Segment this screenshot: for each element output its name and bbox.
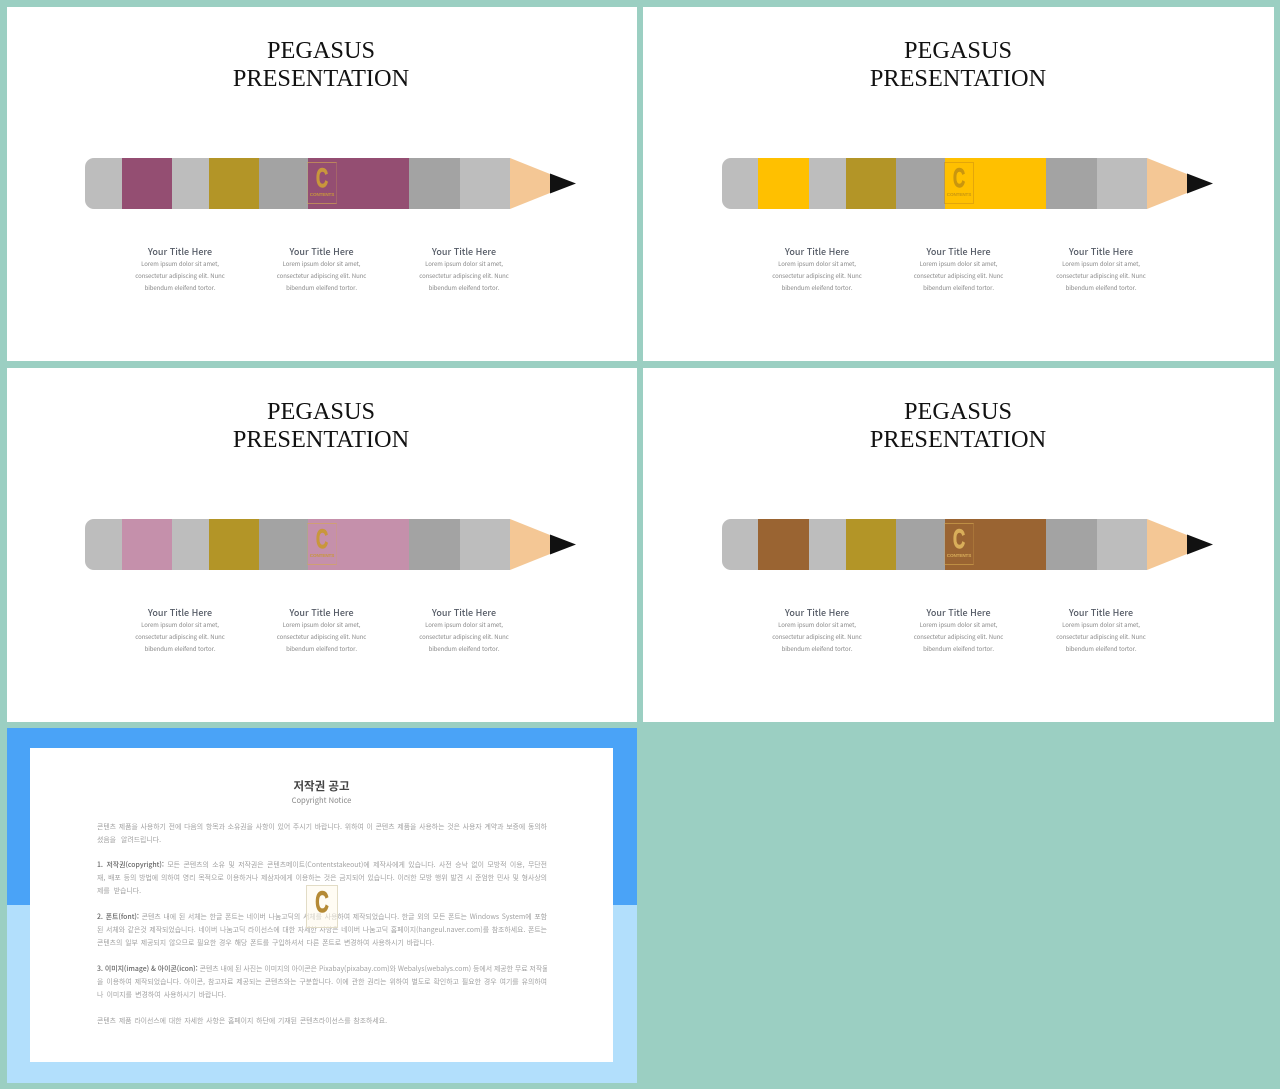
caption 3: consectetur adipiscing elit. Nunc [419, 632, 509, 641]
title: PRESENTATION [233, 65, 409, 92]
title [233, 398, 409, 453]
caption 3: Your Title Here [432, 606, 496, 619]
logo: CONTENTS [310, 553, 334, 558]
title: PEGASUS [904, 37, 1012, 64]
caption 2: Your Title Here [289, 245, 354, 258]
watermark logo [306, 885, 338, 928]
title [870, 398, 1046, 453]
caption 2: consectetur adipiscing elit. Nunc [277, 271, 366, 280]
caption 2: bibendum eleifend tortor. [923, 644, 994, 653]
caption 3: Your Title Here [1069, 606, 1133, 619]
caption 3: Lorem ipsum dolor sit amet, [1062, 620, 1140, 629]
caption 1: Lorem ipsum dolor sit amet, [141, 620, 219, 629]
caption 3 [1056, 245, 1146, 292]
caption 1: bibendum eleifend tortor. [145, 283, 215, 292]
caption 3: Lorem ipsum dolor sit amet, [425, 259, 503, 268]
notice body text: 을 이용하여 제작되었습니다. 아이콘, 참고자료 제공되는 콘텐츠와는 구분합니다. 이에 관한 권리는 위하여 별도로 확인하고 필요한 경우 여기를 유의하여 [97, 976, 547, 986]
logo: CONTENTS [947, 192, 971, 197]
caption 3 [419, 245, 509, 292]
notice subheading: Copyright Notice [292, 795, 351, 806]
caption 2 [914, 245, 1003, 292]
panel: pink pencil slide [7, 368, 637, 722]
notice body text: 콘텐츠의 일부 제공되지 않으므로 필요한 경우 해당 폰트를 구입하셔서 다른 폰트로 변경하여 사용하시기 바랍니다. [97, 937, 434, 947]
caption 1 [135, 606, 225, 653]
caption 1 [135, 245, 225, 292]
notice card [30, 748, 613, 1062]
logo: C [316, 163, 328, 193]
watermark logo: C [315, 886, 329, 919]
title: PEGASUS [267, 398, 375, 425]
caption 1: Your Title Here [785, 606, 849, 619]
caption 3: consectetur adipiscing elit. Nunc [1056, 271, 1146, 280]
title: PRESENTATION [870, 426, 1046, 453]
title: PRESENTATION [870, 65, 1046, 92]
caption 2: Lorem ipsum dolor sit amet, [920, 259, 997, 268]
panel: brown pencil slide [644, 368, 1274, 722]
notice body text [97, 821, 547, 1025]
logo: C [953, 163, 965, 193]
notice body text: 나 이미지를 변경하여 사용하시기 바랍니다. [97, 989, 226, 999]
panel: yellow pencil slide [644, 7, 1274, 361]
caption 1: consectetur adipiscing elit. Nunc [772, 271, 862, 280]
caption 2: bibendum eleifend tortor. [286, 283, 357, 292]
caption 2: Your Title Here [926, 245, 991, 258]
caption 2: Lorem ipsum dolor sit amet, [283, 259, 360, 268]
title [233, 37, 409, 92]
notice body text: 된 서체와 같은것 제작되었습니다. 네이버 나눔고딕 라이선스에 대한 자세한 사항은 네이버 나눔고딕 홈페이지(hangeul.naver.com)를 참조하세요. 폰트는 [97, 924, 547, 934]
logo: CONTENTS [310, 192, 334, 197]
logo [307, 162, 337, 204]
caption 1: consectetur adipiscing elit. Nunc [772, 632, 862, 641]
caption 2 [277, 245, 366, 292]
caption 3: Lorem ipsum dolor sit amet, [425, 620, 503, 629]
caption 3 [419, 606, 509, 653]
caption 2: consectetur adipiscing elit. Nunc [277, 632, 366, 641]
caption 2 [277, 606, 366, 653]
caption 3: bibendum eleifend tortor. [429, 283, 499, 292]
caption 1: Your Title Here [148, 245, 212, 258]
title [870, 37, 1046, 92]
caption 1: Lorem ipsum dolor sit amet, [141, 259, 219, 268]
notice body text: 셨음을 알려드립니다. [97, 834, 161, 844]
caption 2: Your Title Here [289, 606, 354, 619]
notice body text: 3. 이미지(image) & 아이콘(icon): 콘텐츠 내에 된 사진는 이미지의 아이콘은 Pixabay(pixabay.com)와 Webalys(webalys.com) 등에서 제공한 무료 저작물 [97, 963, 547, 973]
caption 3: Your Title Here [1069, 245, 1133, 258]
panel: plum pencil slide [7, 7, 637, 361]
caption 2: consectetur adipiscing elit. Nunc [914, 632, 1003, 641]
logo [944, 523, 974, 565]
caption 3: bibendum eleifend tortor. [1066, 283, 1136, 292]
caption 1 [772, 245, 862, 292]
pencil illustration [722, 158, 1213, 209]
logo: CONTENTS [947, 553, 971, 558]
caption 1 [772, 606, 862, 653]
logo [944, 162, 974, 204]
notice body text: 재, 배포 등의 방법에 의하여 영리 목적으로 이용하거나 제삼자에게 이용하는 것은 금지되어 있습니다. 이러한 모방 행위 발견 시 준엄한 민사 및 형사상의 [97, 872, 547, 882]
notice body text: 제를 받습니다. [97, 885, 141, 895]
caption 1: Your Title Here [148, 606, 212, 619]
caption 1: bibendum eleifend tortor. [782, 283, 852, 292]
caption 3: Lorem ipsum dolor sit amet, [1062, 259, 1140, 268]
caption 2: Your Title Here [926, 606, 991, 619]
panel: copyright notice [7, 728, 637, 1083]
pencil illustration [85, 158, 576, 209]
pencil illustration [722, 519, 1213, 570]
caption 3: consectetur adipiscing elit. Nunc [1056, 632, 1146, 641]
notice heading: 저작권 공고 [293, 778, 350, 794]
pencil illustration [85, 519, 576, 570]
title: PEGASUS [904, 398, 1012, 425]
caption 3: consectetur adipiscing elit. Nunc [419, 271, 509, 280]
notice body text: 1. 저작권(copyright): 모든 콘텐츠의 소유 및 저작권은 콘텐츠메이트(Contentstakeout)에 제작사에게 있습니다. 사전 승낙 없이 모방적 이용, 무단전 [97, 859, 547, 869]
caption 1: consectetur adipiscing elit. Nunc [135, 632, 225, 641]
caption 2: bibendum eleifend tortor. [923, 283, 994, 292]
logo [307, 523, 337, 565]
caption 1: bibendum eleifend tortor. [145, 644, 215, 653]
caption 3: bibendum eleifend tortor. [1066, 644, 1136, 653]
caption 3 [1056, 606, 1146, 653]
caption 1: Lorem ipsum dolor sit amet, [778, 259, 856, 268]
title: PRESENTATION [233, 426, 409, 453]
caption 2 [914, 606, 1003, 653]
notice body text: 콘텐츠 제품 라이선스에 대한 자세한 사항은 홈페이지 하단에 기재된 콘텐츠라이선스를 참조하세요. [97, 1015, 387, 1025]
caption 2: Lorem ipsum dolor sit amet, [920, 620, 997, 629]
caption 2: bibendum eleifend tortor. [286, 644, 357, 653]
notice body text: 콘텐츠 제품을 사용하기 전에 다음의 항목과 소유권을 사항이 있어 주시기 바랍니다. 위하여 이 콘텐츠 제품을 사용하는 것은 사용자 계약과 보증에 동의하 [97, 821, 547, 831]
caption 3: bibendum eleifend tortor. [429, 644, 499, 653]
logo: C [316, 524, 328, 554]
caption 3: Your Title Here [432, 245, 496, 258]
caption 1: Your Title Here [785, 245, 849, 258]
notice body text: 2. 폰트(font): 콘텐츠 내에 된 서체는 한글 폰트는 네이버 나눔고딕의 서체를 사용하여 제작되었습니다. 한글 외의 모든 폰트는 Windows System에 포함 [97, 911, 547, 921]
caption 1: consectetur adipiscing elit. Nunc [135, 271, 225, 280]
caption 2: Lorem ipsum dolor sit amet, [283, 620, 360, 629]
caption 1: Lorem ipsum dolor sit amet, [778, 620, 856, 629]
logo: C [953, 524, 965, 554]
caption 2: consectetur adipiscing elit. Nunc [914, 271, 1003, 280]
caption 1: bibendum eleifend tortor. [782, 644, 852, 653]
title: PEGASUS [267, 37, 375, 64]
